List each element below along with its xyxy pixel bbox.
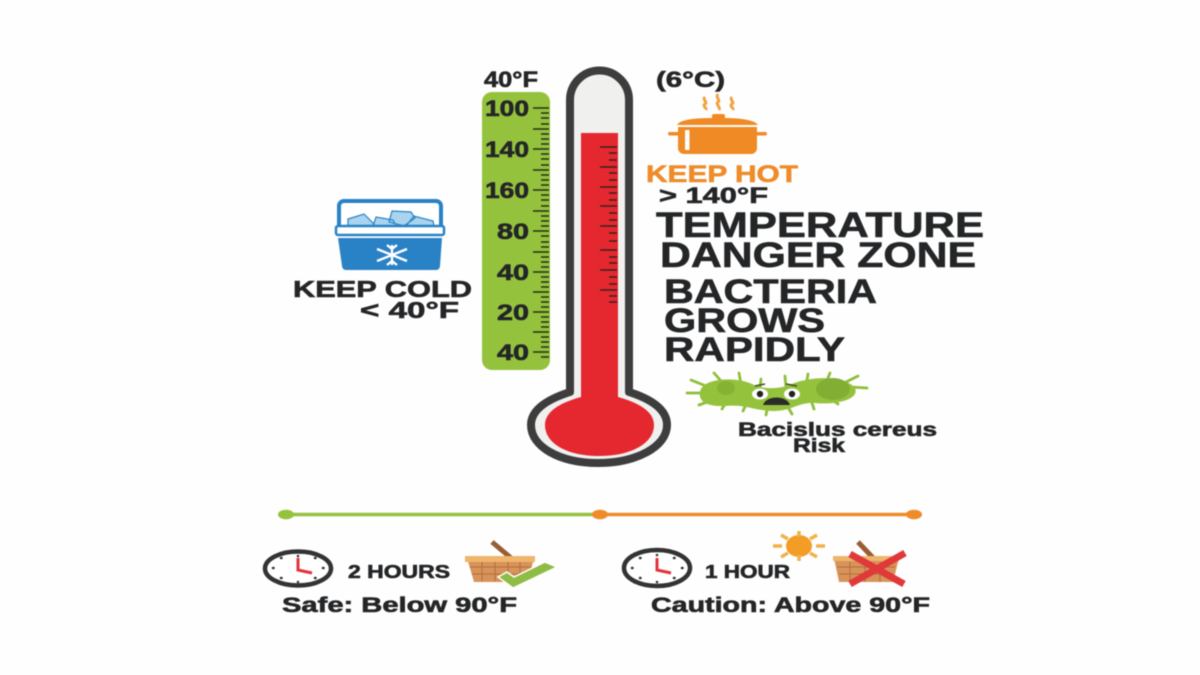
thermometer tick marks xyxy=(600,147,617,302)
caution label: Caution: Above 90°F xyxy=(651,594,930,617)
icon: sun xyxy=(773,531,825,561)
bacteria warning: BACTERIA xyxy=(664,273,877,311)
bacteria caption: Risk xyxy=(793,436,846,457)
icon: steaming pot xyxy=(668,94,767,154)
thermometer xyxy=(531,70,667,463)
keep cold label xyxy=(293,276,472,323)
green temperature scale xyxy=(482,92,550,370)
hot threshold: > 140°F xyxy=(659,183,768,208)
1 hour label: 1 HOUR xyxy=(705,562,790,582)
icon: cooler with ice xyxy=(336,201,444,270)
green temperature scale: 40 xyxy=(497,340,529,365)
bacteria warning xyxy=(664,273,877,369)
green temperature scale: 40 xyxy=(497,260,529,285)
safe label: Safe: Below 90°F xyxy=(282,594,517,617)
celsius label: (6°C) xyxy=(656,67,725,92)
green temperature scale: 140 xyxy=(485,137,529,162)
green temperature scale: 80 xyxy=(497,219,529,244)
mercury column and bulb xyxy=(545,133,654,456)
bacteria caption xyxy=(738,420,937,457)
keep cold label: < 40°F xyxy=(360,297,459,323)
bacteria caption: Bacislus cereus xyxy=(738,420,937,441)
green temperature scale: 160 xyxy=(485,178,529,203)
icon: bacteria xyxy=(687,373,867,415)
keep cold label: KEEP COLD xyxy=(293,276,472,302)
thermometer outline xyxy=(531,70,667,463)
icon: basket with cross xyxy=(833,542,905,584)
bacteria warning: RAPIDLY xyxy=(664,331,845,369)
icon: basket with check xyxy=(465,542,557,588)
icon: clock, 2 hours xyxy=(265,552,331,586)
bacteria warning: GROWS xyxy=(664,302,825,340)
2 hours label: 2 HOURS xyxy=(348,562,450,582)
green temperature scale: 100 xyxy=(485,96,529,121)
title: TEMPERATURE xyxy=(656,206,984,245)
title: DANGER ZONE xyxy=(660,236,976,275)
icon: clock, 1 hour xyxy=(624,550,690,586)
timeline xyxy=(278,510,922,519)
green temperature scale: 20 xyxy=(497,300,529,325)
fahrenheit label: 40°F xyxy=(484,67,538,92)
keep hot label: KEEP HOT xyxy=(646,161,798,188)
title xyxy=(656,206,984,275)
